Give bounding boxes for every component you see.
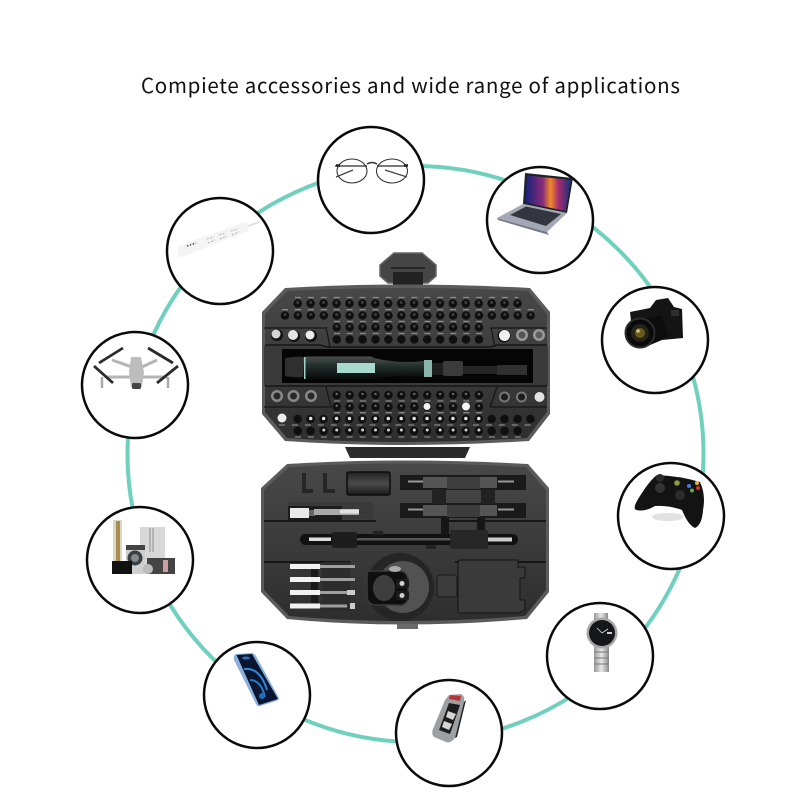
handle slot — [282, 349, 533, 383]
bit labels — [279, 298, 534, 437]
icon: smartphone — [234, 653, 279, 706]
icon circle: laptop — [487, 167, 593, 273]
toolkit case — [261, 253, 550, 629]
icon: car key fob — [432, 694, 466, 742]
icon: laptop — [497, 173, 573, 235]
L slots — [302, 473, 335, 493]
screwdriver — [285, 356, 527, 380]
icon: wristwatch — [586, 613, 618, 672]
case latch — [380, 253, 436, 285]
storage card — [458, 560, 525, 613]
small clip slot — [437, 575, 457, 597]
teal connecting ring — [128, 166, 704, 742]
icon circle: smartphone — [204, 642, 310, 748]
icon: power strip — [178, 222, 260, 257]
icon circle: power strip — [167, 198, 273, 304]
icon circle: glasses — [318, 127, 424, 233]
icon: appliances — [112, 520, 175, 574]
four precision tools — [290, 562, 355, 611]
hinge — [345, 447, 470, 458]
icon circle: game controller — [618, 463, 724, 569]
long driver — [300, 530, 518, 549]
title: Compiete accessories and wide range of applications — [141, 69, 680, 99]
icon circle: car key — [396, 680, 502, 786]
icon: DSLR camera — [626, 298, 683, 348]
upper right holders — [400, 475, 526, 534]
lower tray — [261, 460, 549, 629]
icon circle: camera — [602, 287, 708, 393]
icon circle: drone — [82, 332, 188, 438]
icon circle: home appliances — [87, 507, 193, 613]
upper tray — [262, 284, 550, 445]
bit rows — [279, 298, 534, 437]
round ratchet tool — [366, 553, 434, 621]
icon: glasses — [335, 159, 408, 183]
icon: controller — [635, 474, 704, 528]
extension bit holder — [288, 502, 373, 520]
icon circle: watch — [547, 603, 653, 709]
rectangular slot — [347, 472, 390, 495]
large sockets — [271, 329, 545, 422]
icon: drone — [94, 348, 178, 389]
